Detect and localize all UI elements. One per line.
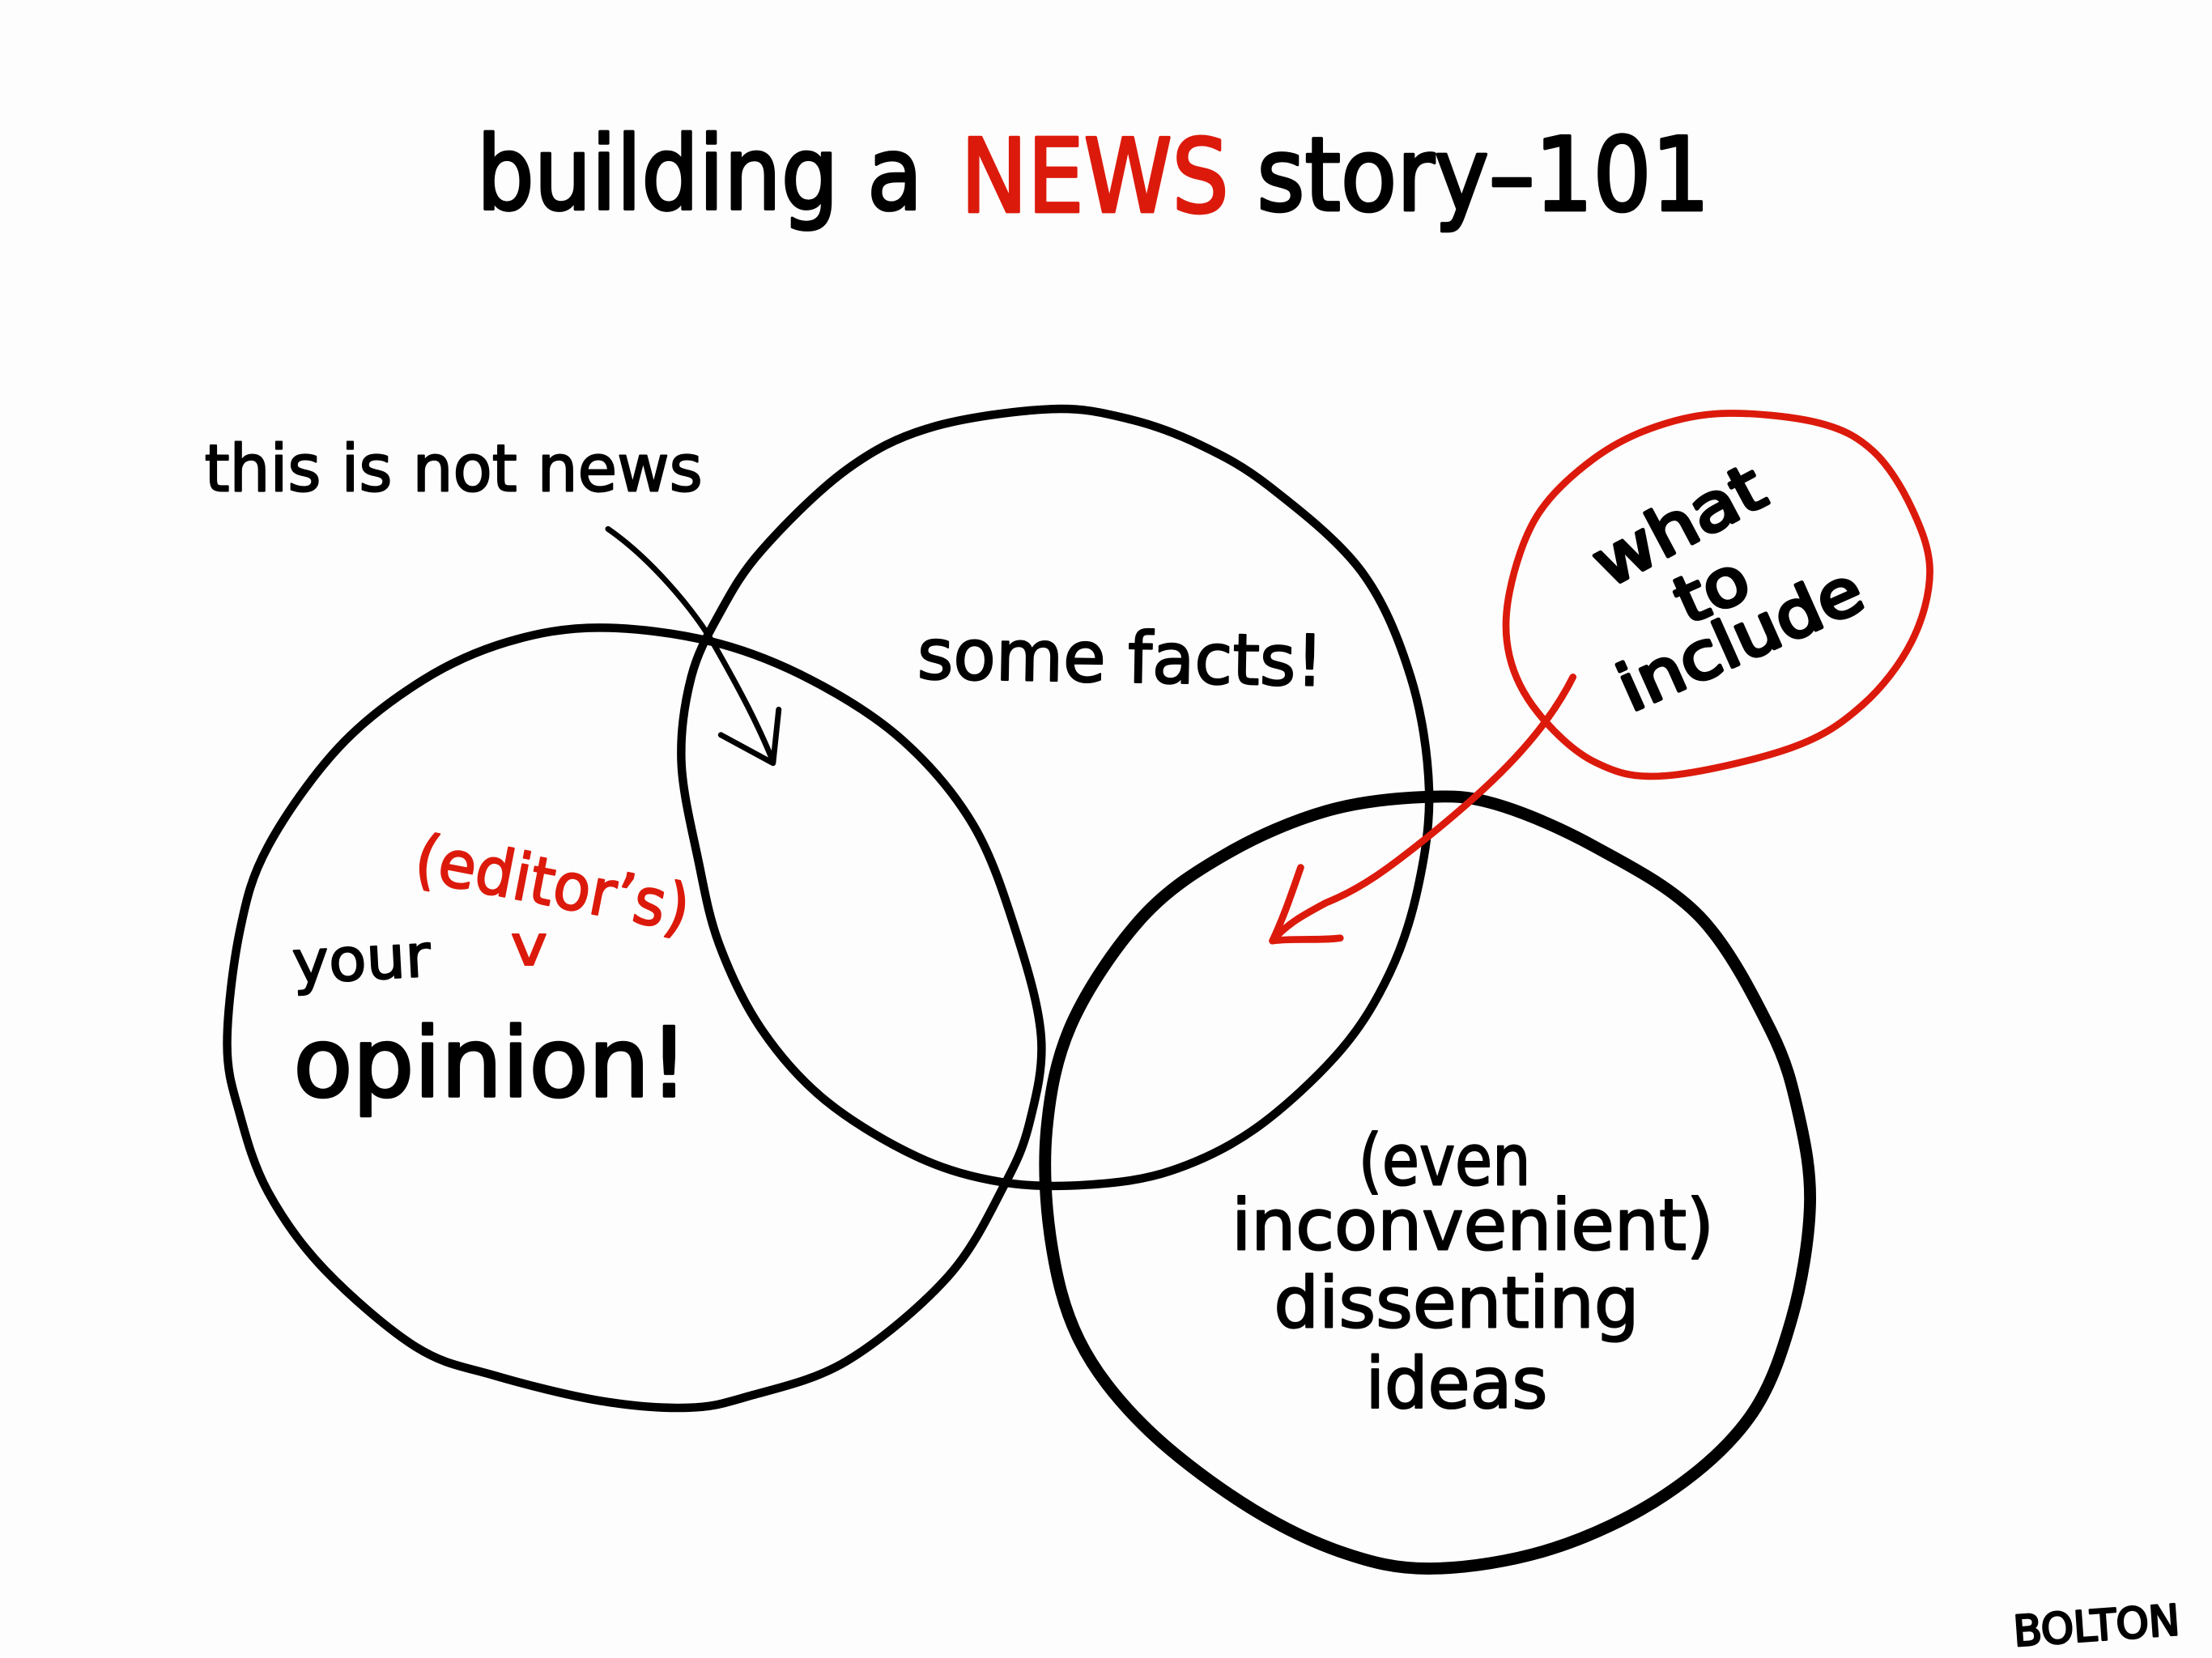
label: some facts: some facts! — [917, 613, 1325, 703]
circle: your opinion — [228, 627, 1041, 1408]
label: what to include: what — [1580, 449, 1777, 602]
label: what to include: include — [1606, 552, 1874, 726]
title — [477, 115, 1710, 236]
circle: some facts — [681, 409, 1429, 1186]
label: editor's insertion: (editor’s) — [409, 820, 696, 947]
label: what to include — [1580, 449, 1874, 726]
label: dissenting ideas: dissenting — [1274, 1262, 1640, 1345]
red arrow to dissenting ideas overlap — [1273, 677, 1573, 941]
label: your: your — [291, 922, 433, 997]
label: what to include: to — [1663, 540, 1760, 639]
label: dissenting ideas: inconvenient) — [1231, 1184, 1714, 1267]
signature: Bolton: BOLTON — [2012, 1596, 2181, 1656]
circle: dissenting ideas — [1045, 797, 1810, 1569]
title word: NEWS: NEWS — [961, 117, 1229, 236]
insertion mark: v — [511, 913, 547, 979]
label: this is not news: this is not news — [205, 431, 703, 506]
title suffix: story-101: story–101 — [1257, 117, 1710, 235]
red loop: what to include — [1506, 413, 1930, 776]
black arrow to not news overlap — [608, 529, 779, 763]
title: building a — [477, 115, 922, 233]
label: dissenting ideas — [1231, 1120, 1714, 1425]
label: dissenting ideas: (even — [1359, 1120, 1530, 1202]
label: dissenting ideas: ideas — [1366, 1342, 1547, 1425]
label: opinion: opinion! — [293, 1007, 688, 1119]
